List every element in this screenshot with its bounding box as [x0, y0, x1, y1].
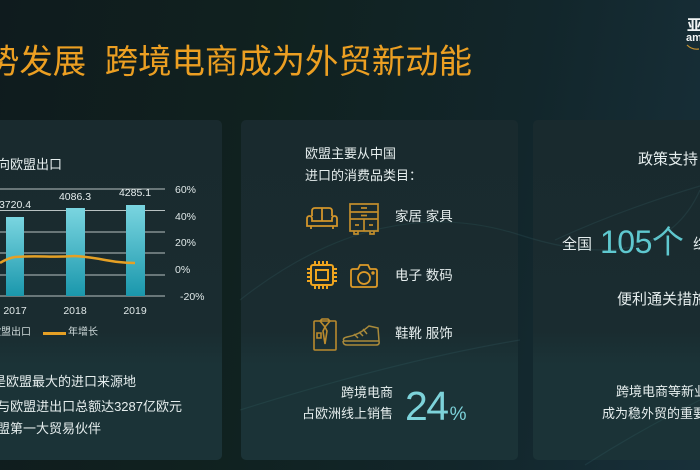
icon: cabinet [349, 203, 379, 235]
icon: chip [307, 261, 337, 289]
text block: trade facts [0, 374, 182, 436]
axis labels: 0% [175, 264, 190, 276]
chart: exports and annual growth [0, 184, 205, 317]
value labels: 4285.1 [119, 187, 151, 199]
text block: new growth driver [602, 384, 700, 421]
axis labels: 20% [175, 237, 196, 249]
heading: categories [305, 146, 422, 183]
year labels: 2017 [3, 305, 27, 317]
icon: camera [350, 264, 378, 288]
axis labels [175, 184, 205, 303]
year labels: 2019 [123, 305, 147, 317]
axis labels: 40% [175, 211, 196, 223]
stat: 24%: 24% [405, 383, 467, 429]
icon: shirt [313, 318, 337, 351]
heading: categories: 欧盟主要从中国 [305, 146, 396, 161]
value labels: 4086.3 [59, 191, 91, 203]
logo: amazon [686, 17, 700, 50]
legend [0, 326, 98, 338]
growth line [0, 256, 135, 263]
stat: 105 zones: 全国 [562, 236, 592, 253]
year labels [3, 305, 147, 317]
axis labels: 60% [175, 184, 196, 196]
value labels [0, 187, 151, 211]
label: apparel: 鞋靴 服饰 [395, 326, 453, 341]
stat: 105 zones: 105个 [600, 224, 683, 260]
panel: exports to EU [0, 120, 222, 460]
icon: sofa [306, 207, 338, 229]
panel: policy support [533, 120, 700, 460]
stat: 105 zones [562, 224, 700, 260]
legend: 年增长 [68, 327, 98, 338]
label: electronics: 电子 数码 [395, 268, 453, 283]
text block: online sales share: 占欧洲线上销售 [302, 406, 393, 421]
text block: online sales share [302, 385, 393, 421]
panel: consumer categories [241, 120, 518, 460]
heading: policy support: 政策支持 [638, 151, 698, 168]
axis labels: -20% [180, 291, 205, 303]
label: furniture: 家居 家具 [395, 209, 453, 224]
icon: sneaker [342, 325, 380, 346]
heading: categories: 进口的消费品类目： [305, 168, 422, 183]
bars [6, 205, 145, 296]
text block: online sales share: 跨境电商 [341, 385, 393, 400]
year labels: 2018 [63, 305, 87, 317]
